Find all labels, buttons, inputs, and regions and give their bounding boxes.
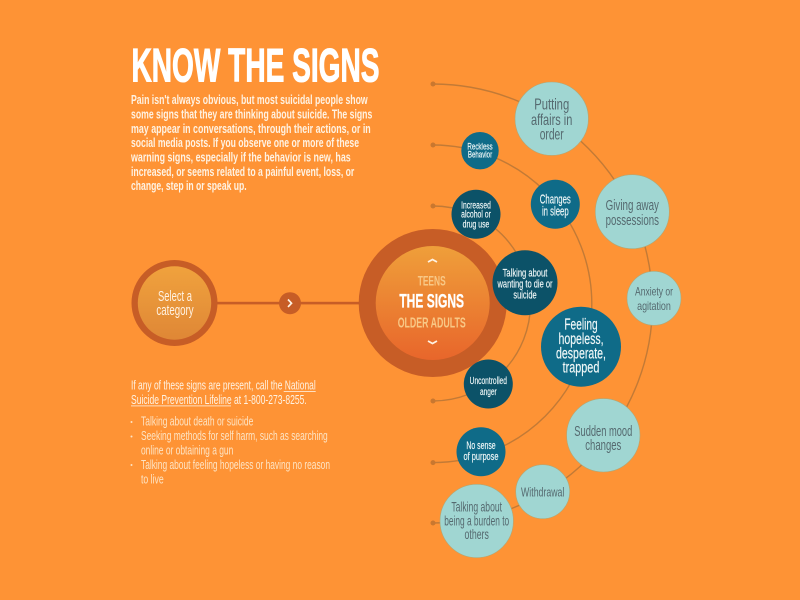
bubble: increased alcohol or drug use [452,190,500,239]
bubble: feeling hopeless, desperate, trapped: hopeless, [558,331,604,348]
bubble: putting affairs in order: affairs in [531,112,572,129]
bubble: putting affairs in order [515,82,588,155]
bubble: feeling hopeless, desperate, trapped: desperate, [556,345,606,362]
main circle: the signs: THE SIGNS [399,292,464,313]
intro text block: increased, or seems related to a painful event, loss, or [131,164,354,179]
bubble: talking about wanting to die or suicide: Talking about [503,268,547,280]
intro text block: social media posts. If you observe one or more of these [131,135,359,150]
bubble: uncontrolled anger [464,360,513,408]
warning signs list: Seeking methods for self harm, such as searching [141,428,328,443]
bubble: talking about wanting to die or suicide: suicide [513,289,537,301]
intro text block: may appear in conversations, through their actions, or in [131,121,371,136]
selector circle: category [156,302,194,319]
bubble: talking about wanting to die or suicide [492,250,558,315]
warning signs list [130,414,330,486]
bubble: sudden mood changes: Sudden mood [574,424,632,440]
connector line from selector to main circle [215,302,365,304]
lifeline text: Suicide Prevention Lifeline at 1-800-273-8255. [131,392,307,407]
bubble: talking about being a burden to others: others [465,526,489,542]
bubble: feeling hopeless, desperate, trapped: Feeling [564,316,598,333]
bubble: increased alcohol or drug use: drug use [463,219,490,230]
bubble: withdrawal [516,465,570,519]
bubble: putting affairs in order: Putting [534,96,569,113]
bubble: no sense of purpose: No sense [466,440,496,452]
warning signs list: Talking about feeling hopeless or having no reason [141,457,330,472]
selector circle: Select a [158,288,192,305]
bubble: changes in sleep: Changes [540,192,571,206]
bubble: uncontrolled anger: Uncontrolled [470,376,507,387]
inner arc [430,204,530,404]
intro text block: Pain isn't always obvious, but most suicidal people show [131,92,368,107]
main circle: the signs: TEENS [418,273,446,289]
outer arc [430,82,653,526]
warning signs list: online or obtaining a gun [141,443,233,458]
bubble: reckless behavior [461,132,499,169]
bubble: giving away possessions: Giving away [606,197,659,214]
bubble: giving away possessions [595,175,669,249]
bubble: talking about being a burden to others: Talking about [451,499,502,515]
bubble: withdrawal: Withdrawal [521,485,564,500]
bubble: reckless behavior: Behavior [468,149,492,159]
warning signs list: to live [141,471,164,486]
lifeline text: If any of these signs are present, call the National [131,378,316,392]
arrow button [279,292,301,314]
intro text block: warning signs, especially if the behavior is new, has [130,150,351,164]
warning signs list: Talking about death or suicide [141,414,253,429]
middle arc [430,142,592,465]
bubble: anxiety or agitation: Anxiety or [635,284,673,298]
intro text block: some signs that they are thinking about suicide. The signs [131,106,372,122]
bubble: no sense of purpose [456,427,506,476]
intro text block: change, step in or speak up. [131,178,247,193]
selector circle [132,260,218,346]
intro text block [130,92,372,193]
bubble: sudden mood changes: changes [585,438,621,454]
bubble: reckless behavior: Reckless [467,141,493,151]
bubble: giving away possessions: possessions [606,212,659,229]
bubble: increased alcohol or drug use: Increased [461,200,491,211]
bubble: anxiety or agitation: agitation [637,299,671,313]
bubble: talking about being a burden to others: being a burden to [444,513,509,529]
main circle: the signs: OLDER ADULTS [398,314,466,331]
bubble: putting affairs in order: order [540,126,564,143]
bubble: uncontrolled anger: anger [480,387,497,398]
bubble: feeling hopeless, desperate, trapped: trapped [563,359,599,376]
bubble: sudden mood changes [567,399,640,472]
bubble: no sense of purpose: of purpose [464,451,498,463]
bubble: talking about wanting to die or suicide: wanting to die or [497,278,553,290]
bubble: talking about being a burden to others [440,484,513,558]
bubble: anxiety or agitation [627,271,681,325]
bubble: increased alcohol or drug use: alcohol or [461,210,491,221]
bubble: changes in sleep [531,180,580,229]
title: KNOW THE SIGNS [132,38,380,92]
bubble: feeling hopeless, desperate, trapped [541,307,621,387]
main circle: the signs [359,229,507,377]
bubble: changes in sleep: in sleep [542,205,569,219]
lifeline text [131,378,316,407]
